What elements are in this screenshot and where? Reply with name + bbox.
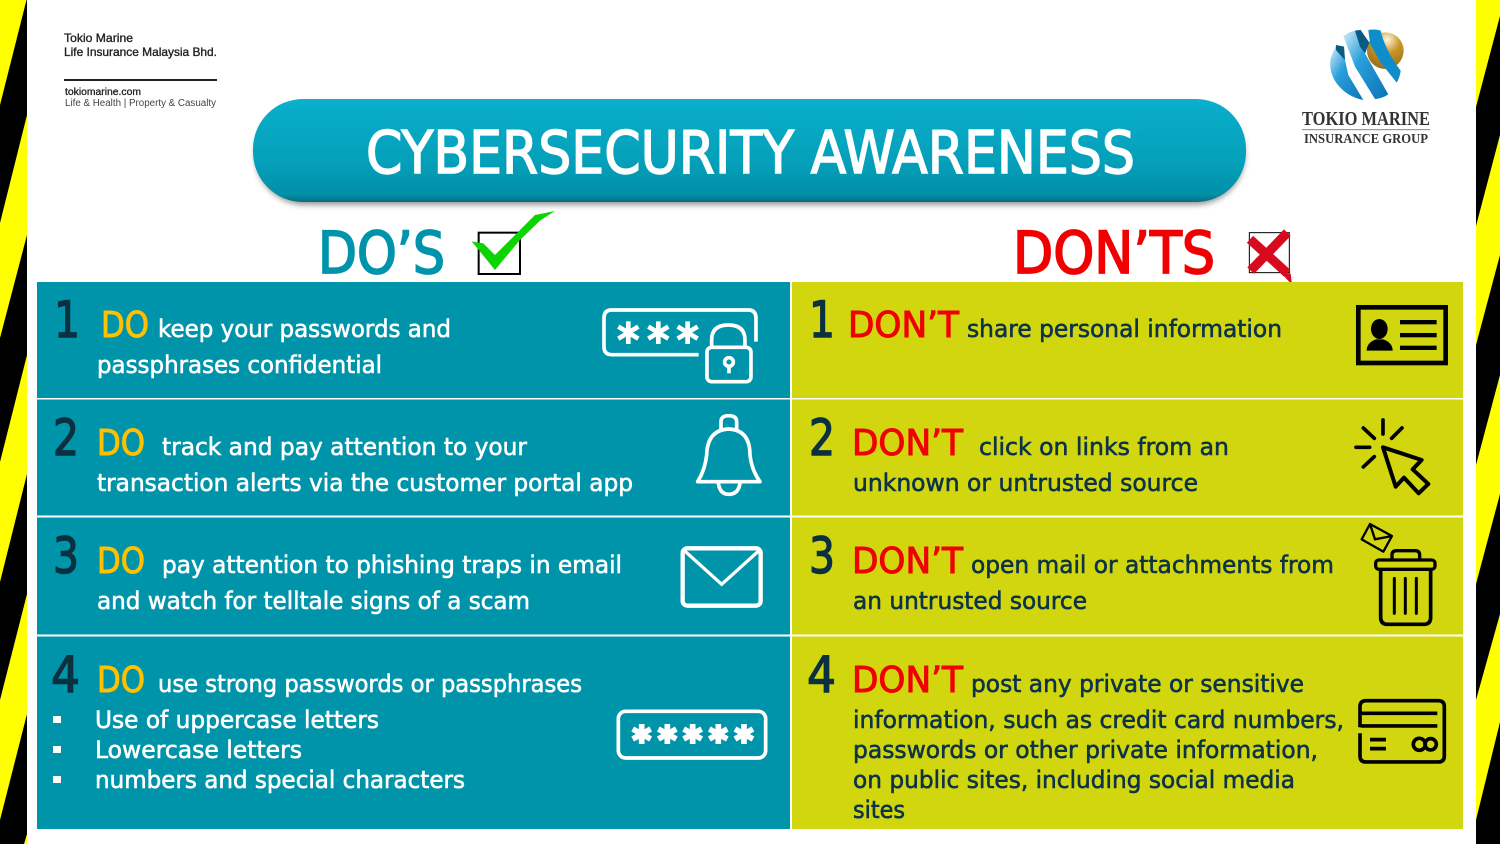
do item 2: DO: [97, 423, 145, 464]
do item 4: DO: [97, 660, 145, 701]
don't item 4: DON’T: [852, 660, 964, 701]
don't item 2: 2: [809, 409, 835, 467]
don't item 4: sites: [853, 796, 905, 824]
do item 3: pay attention to phishing traps in email: [162, 551, 622, 579]
do item 3: DO: [97, 541, 145, 582]
icon: mail in trash can: [1362, 524, 1435, 624]
do item 1: 1: [54, 291, 80, 349]
do item 1: DO: [101, 305, 149, 346]
icon: ID card: [1358, 307, 1446, 363]
heading: do's: DO’S: [318, 219, 445, 287]
do item 4: numbers and special characters: [95, 766, 465, 794]
left hazard stripe: [0, 0, 27, 844]
heading: don'ts: DON’TS: [1013, 219, 1215, 287]
don't item 3: DON’T: [852, 541, 964, 582]
do item 1: passphrases confidential: [97, 351, 382, 379]
don't item 4: on public sites, including social media: [853, 766, 1295, 794]
do item 1: [54, 291, 451, 379]
do item 4: use strong passwords or passphrases: [158, 670, 582, 698]
panel: do's: [37, 282, 790, 829]
don't item 2: unknown or untrusted source: [853, 469, 1198, 497]
do item 2: 2: [53, 409, 79, 467]
icon: masked password: [618, 711, 766, 758]
do item 3: and watch for telltale signs of a scam: [97, 587, 530, 615]
company name block: Life & Health | Property & Casualty: [65, 98, 216, 109]
don't item 4: [807, 646, 1344, 824]
don't item 3: an untrusted source: [853, 587, 1087, 615]
don't item 2: DON’T: [852, 423, 964, 464]
don't item 4: passwords or other private information,: [853, 736, 1318, 764]
icon: password lock: [604, 310, 756, 382]
don't item 2: click on links from an: [979, 433, 1229, 461]
Tokio Marine logo: [1302, 29, 1430, 146]
Tokio Marine logo: TOKIO MARINE: [1302, 108, 1430, 130]
icon: envelope: [683, 548, 761, 606]
don't item 4: post any private or sensitive: [971, 670, 1304, 698]
icon: check mark in box: [472, 211, 555, 274]
don't item 3: open mail or attachments from: [971, 551, 1334, 579]
do item 4: Lowercase letters: [95, 736, 302, 764]
do item 2: [53, 409, 633, 497]
do item 2: track and pay attention to your: [162, 433, 527, 461]
right hazard stripe: [1476, 0, 1500, 844]
company name block: Life Insurance Malaysia Bhd.: [64, 45, 217, 59]
do item 3: 3: [53, 527, 79, 585]
don't item 4: information, such as credit card numbers,: [853, 706, 1344, 734]
do item 2: transaction alerts via the customer portal app: [97, 469, 633, 497]
do item 4: [51, 646, 582, 794]
panel: don'ts: [792, 282, 1463, 829]
don't item 4: 4: [807, 646, 836, 704]
don't item 2: [809, 409, 1229, 497]
do item 4: Use of uppercase letters: [95, 706, 379, 734]
icon: cross in box: [1249, 233, 1292, 285]
don't item 1: 1: [809, 291, 835, 349]
don't item 3: [809, 527, 1334, 615]
don't item 1: share personal information: [967, 315, 1282, 343]
icon: cursor click: [1356, 420, 1428, 493]
company name block: tokiomarine.com: [65, 87, 141, 98]
company name block: Tokio Marine: [64, 31, 133, 45]
do item 3: [53, 527, 622, 615]
title banner: [253, 99, 1246, 205]
icon: credit card: [1360, 701, 1444, 762]
Tokio Marine logo: INSURANCE GROUP: [1304, 131, 1428, 146]
company name block: [64, 31, 217, 109]
do item 4: 4: [51, 646, 80, 704]
do item 1: keep your passwords and: [158, 315, 451, 343]
don't item 1: DON’T: [848, 305, 960, 346]
icon: bell: [698, 416, 760, 494]
don't item 3: 3: [809, 527, 835, 585]
don't item 1: [809, 291, 1282, 349]
title banner: CYBERSECURITY AWARENESS: [366, 118, 1135, 187]
